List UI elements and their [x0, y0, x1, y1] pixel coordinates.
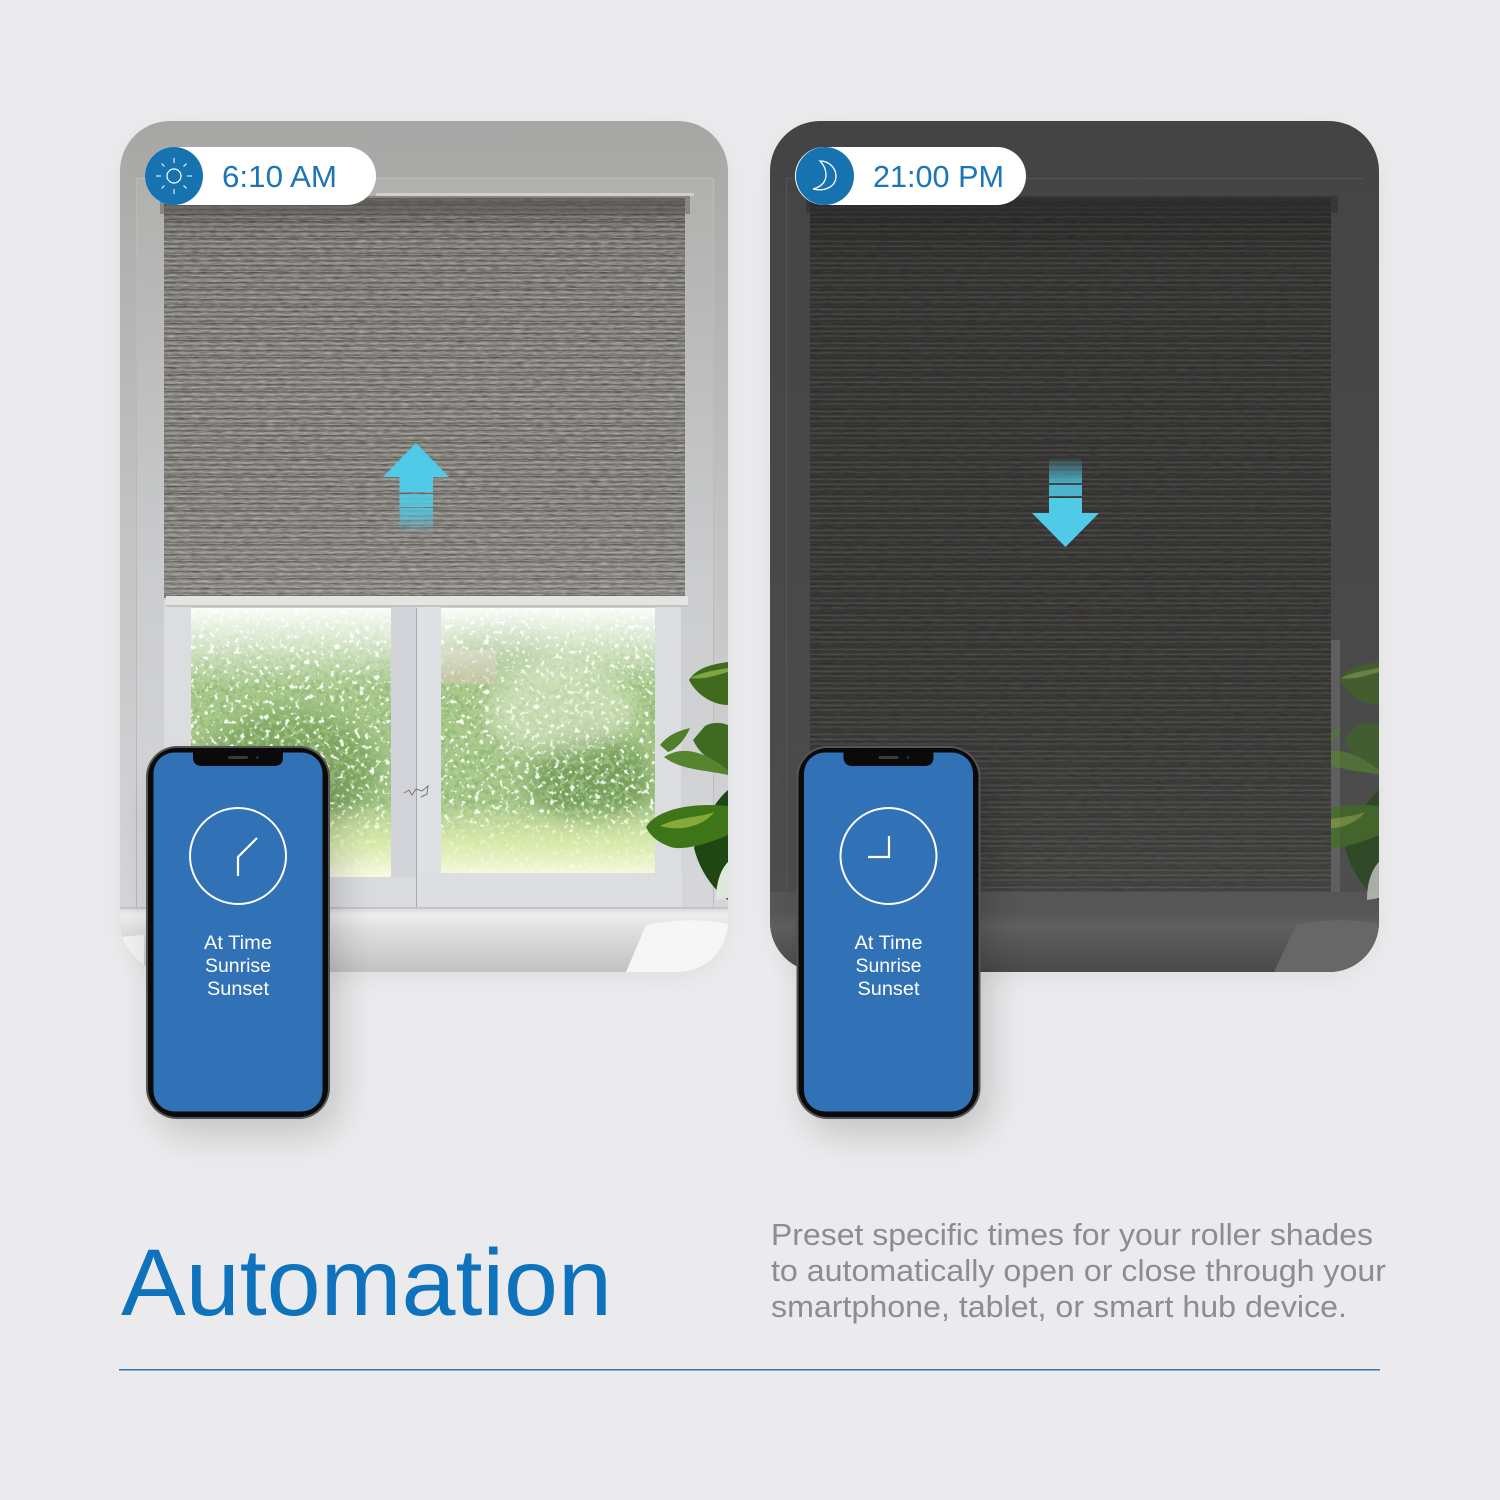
icon: clock — [190, 808, 286, 904]
description text: Preset specific times for your roller shades — [771, 1217, 1373, 1252]
garden view through the window — [191, 608, 655, 877]
schedule options — [854, 932, 922, 1000]
shade roller — [806, 196, 1338, 213]
roller shade fabric — [164, 198, 685, 598]
icon: clock — [840, 808, 936, 904]
time pill: morning — [145, 147, 376, 205]
schedule options: Sunrise — [205, 955, 271, 977]
description text — [771, 1217, 1386, 1324]
roller shade fabric — [810, 198, 1331, 892]
description text: smartphone, tablet, or smart hub device. — [771, 1289, 1347, 1324]
plant — [646, 662, 728, 900]
up arrow — [383, 443, 449, 530]
title: Automation — [121, 1230, 612, 1336]
schedule options — [204, 932, 272, 1000]
phone: morning schedule — [146, 746, 340, 1135]
schedule options: At Time — [204, 932, 272, 954]
window sill — [120, 907, 728, 972]
shade roller — [160, 196, 690, 214]
icon: moon — [796, 147, 854, 205]
panel: morning window scene — [120, 121, 728, 976]
plant — [1331, 662, 1379, 900]
icon: sun — [145, 147, 203, 205]
phone screen — [154, 752, 322, 1112]
phone: night schedule — [796, 746, 991, 1135]
description text: to automatically open or close through your — [771, 1253, 1386, 1288]
schedule options: Sunrise — [856, 955, 922, 977]
label: night time: 21:00 PM — [873, 159, 1004, 194]
phone screen — [804, 752, 973, 1112]
panel: night window scene — [770, 121, 1379, 976]
down arrow — [1032, 459, 1099, 547]
window sill — [1331, 892, 1340, 910]
phone notch — [844, 752, 934, 766]
schedule options: Sunset — [207, 978, 270, 1000]
label: morning time: 6:10 AM — [222, 159, 337, 194]
shade hem bar — [166, 596, 688, 605]
schedule options: At Time — [854, 932, 922, 954]
schedule options: Sunset — [858, 978, 920, 1000]
phone notch — [193, 752, 283, 766]
time pill: night — [795, 147, 1026, 205]
